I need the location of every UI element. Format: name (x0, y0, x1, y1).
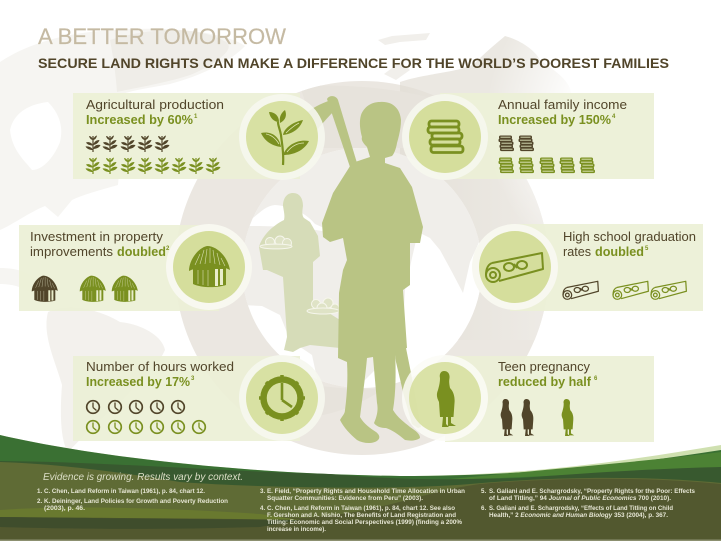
icon: clock (259, 375, 305, 421)
panel: investment in property improvements: 2 (166, 246, 170, 252)
pictogram: huts after (80, 276, 138, 302)
pictogram: diploma before (563, 281, 598, 299)
footnotes column 2: C. Chen, Land Reform in Taiwan (1961), p. 84, chart 12. See also (267, 505, 455, 512)
label: teen pregnancy: Teen pregnancy (498, 360, 591, 374)
footer hills (0, 435, 721, 541)
footnotes column 2: increase in income). (267, 526, 326, 533)
map: hudson bay (10, 102, 61, 170)
pictogram: clocks after (87, 421, 205, 433)
panel: teen pregnancy: 6 (594, 376, 598, 382)
footnotes column 2: 4. (260, 505, 265, 512)
panel: agricultural production: 1 (194, 114, 198, 120)
title: A BETTER TOMORROW (38, 24, 286, 49)
panel: agricultural production (73, 93, 325, 180)
footnotes column 3: 6. (481, 505, 486, 512)
footnotes column 3: Health,” 2 Economic and Human Biology 353 (2004), p. 367. (489, 512, 668, 519)
map: north america (0, 29, 245, 230)
hoe blade (307, 100, 335, 131)
globe land (240, 140, 485, 392)
label: high school graduation rates: High school graduation (563, 230, 696, 244)
icon: plant (261, 110, 309, 165)
footnotes column 3 (481, 488, 696, 519)
pictogram: coins before (498, 136, 534, 151)
stat: increased by 60%: Increased by 60% (86, 113, 193, 127)
pictogram: clocks before (87, 401, 184, 413)
pictogram: women before (501, 399, 534, 436)
footnotes column 1: 1. (37, 488, 42, 495)
icon: pregnant woman (437, 371, 456, 427)
footnotes column 3: S. Galiani and E. Schargrodsky, “Effects of Land Titling on Child (489, 505, 673, 512)
footnotes column 2: 3. (260, 488, 265, 495)
footnotes column 2: F. Gershon and A. Nishio, The Benefits of Land Registration and (267, 512, 456, 519)
footnotes column 1: K. Deininger, Land Policies for Growth and Poverty Reduction (44, 498, 228, 505)
panel: number of hours worked: 3 (191, 376, 195, 382)
icon: hut (189, 246, 230, 287)
stat: doubled: doubled (595, 245, 644, 259)
man silhouette with hoe (307, 96, 423, 443)
stat: increased by 17%: Increased by 17% (86, 375, 190, 389)
pictogram: plants after (86, 158, 220, 174)
pictogram: hut before (32, 276, 58, 302)
footnotes column 1 (37, 488, 228, 512)
panel: teen pregnancy (402, 355, 654, 442)
pictogram: coins after (498, 158, 595, 173)
hoe handle (327, 96, 357, 167)
label: investment in property improvements: Investment in property (30, 230, 164, 244)
footnotes column 1: C. Chen, Land Reform in Taiwan (1961), p. 84, chart 12. (44, 488, 205, 495)
ring land shading (302, 86, 321, 91)
world map background (0, 29, 560, 455)
stat: increased by 150%: Increased by 150% (498, 113, 611, 127)
label: annual family income: Annual family income (498, 98, 627, 112)
label: agricultural production: Agricultural production (86, 98, 224, 112)
map: arctic islands (378, 33, 430, 80)
panel: investment in property improvements: improvements (30, 245, 113, 259)
label: number of hours worked: Number of hours worked (86, 360, 234, 374)
basket on the ground (307, 298, 339, 314)
map: russia and asia (400, 36, 571, 100)
map: fade to white at the right (480, 0, 721, 290)
woman silhouette (259, 193, 340, 352)
footnotes column 1: (2003), p. 46. (44, 505, 85, 512)
panel: high school graduation: 5 (645, 246, 649, 252)
icon: coins (428, 121, 463, 152)
panel: investment in property improvements (19, 224, 252, 311)
panel: high school graduation: rates (563, 245, 591, 259)
footnotes column 3: of Land Titling,” 94 Journal of Public Economics 700 (2010). (489, 495, 671, 502)
pictogram: diplomas after (613, 281, 686, 299)
footnotes column 2: E. Field, “Property Rights and Household Time Allocation in Urban (267, 488, 465, 495)
stat: doubled: doubled (117, 245, 166, 259)
lower handle (394, 348, 421, 428)
globe ring (175, 81, 549, 455)
subtitle: SECURE LAND RIGHTS CAN MAKE A DIFFERENCE FOR THE WORLD’S POOREST FAMILIES (38, 55, 669, 71)
map: south america (46, 307, 165, 452)
map: greenland (110, 30, 229, 92)
footnotes column 3: 5. (481, 488, 486, 495)
footnotes column 2 (260, 488, 465, 533)
panel: number of hours worked (73, 355, 325, 441)
mediterranean (250, 205, 322, 231)
footnotes column 2: Titling: Economic and Social Perspectives (1999) (finding a 200% (267, 519, 462, 526)
panel: annual family income: 4 (612, 114, 616, 120)
footnotes column 2: Squatter Communities: Evidence from Peru” (2003). (267, 495, 423, 502)
pictogram: woman after (562, 399, 574, 436)
panel: high school graduation (472, 224, 703, 311)
footnotes column 1: 2. (37, 498, 42, 505)
footnotes column 3: S. Galiani and E. Schargrodsky, “Property Rights for the Poor: Effects (489, 488, 696, 495)
stat: reduced by half: reduced by half (498, 375, 592, 389)
pictogram: plants before (86, 136, 170, 152)
basket held at the hip (260, 236, 292, 249)
panel: annual family income (402, 93, 654, 180)
map: central america (0, 268, 46, 296)
icon: diploma scroll (486, 253, 543, 282)
evidence note: Evidence is growing. Results vary by context. (43, 472, 243, 483)
